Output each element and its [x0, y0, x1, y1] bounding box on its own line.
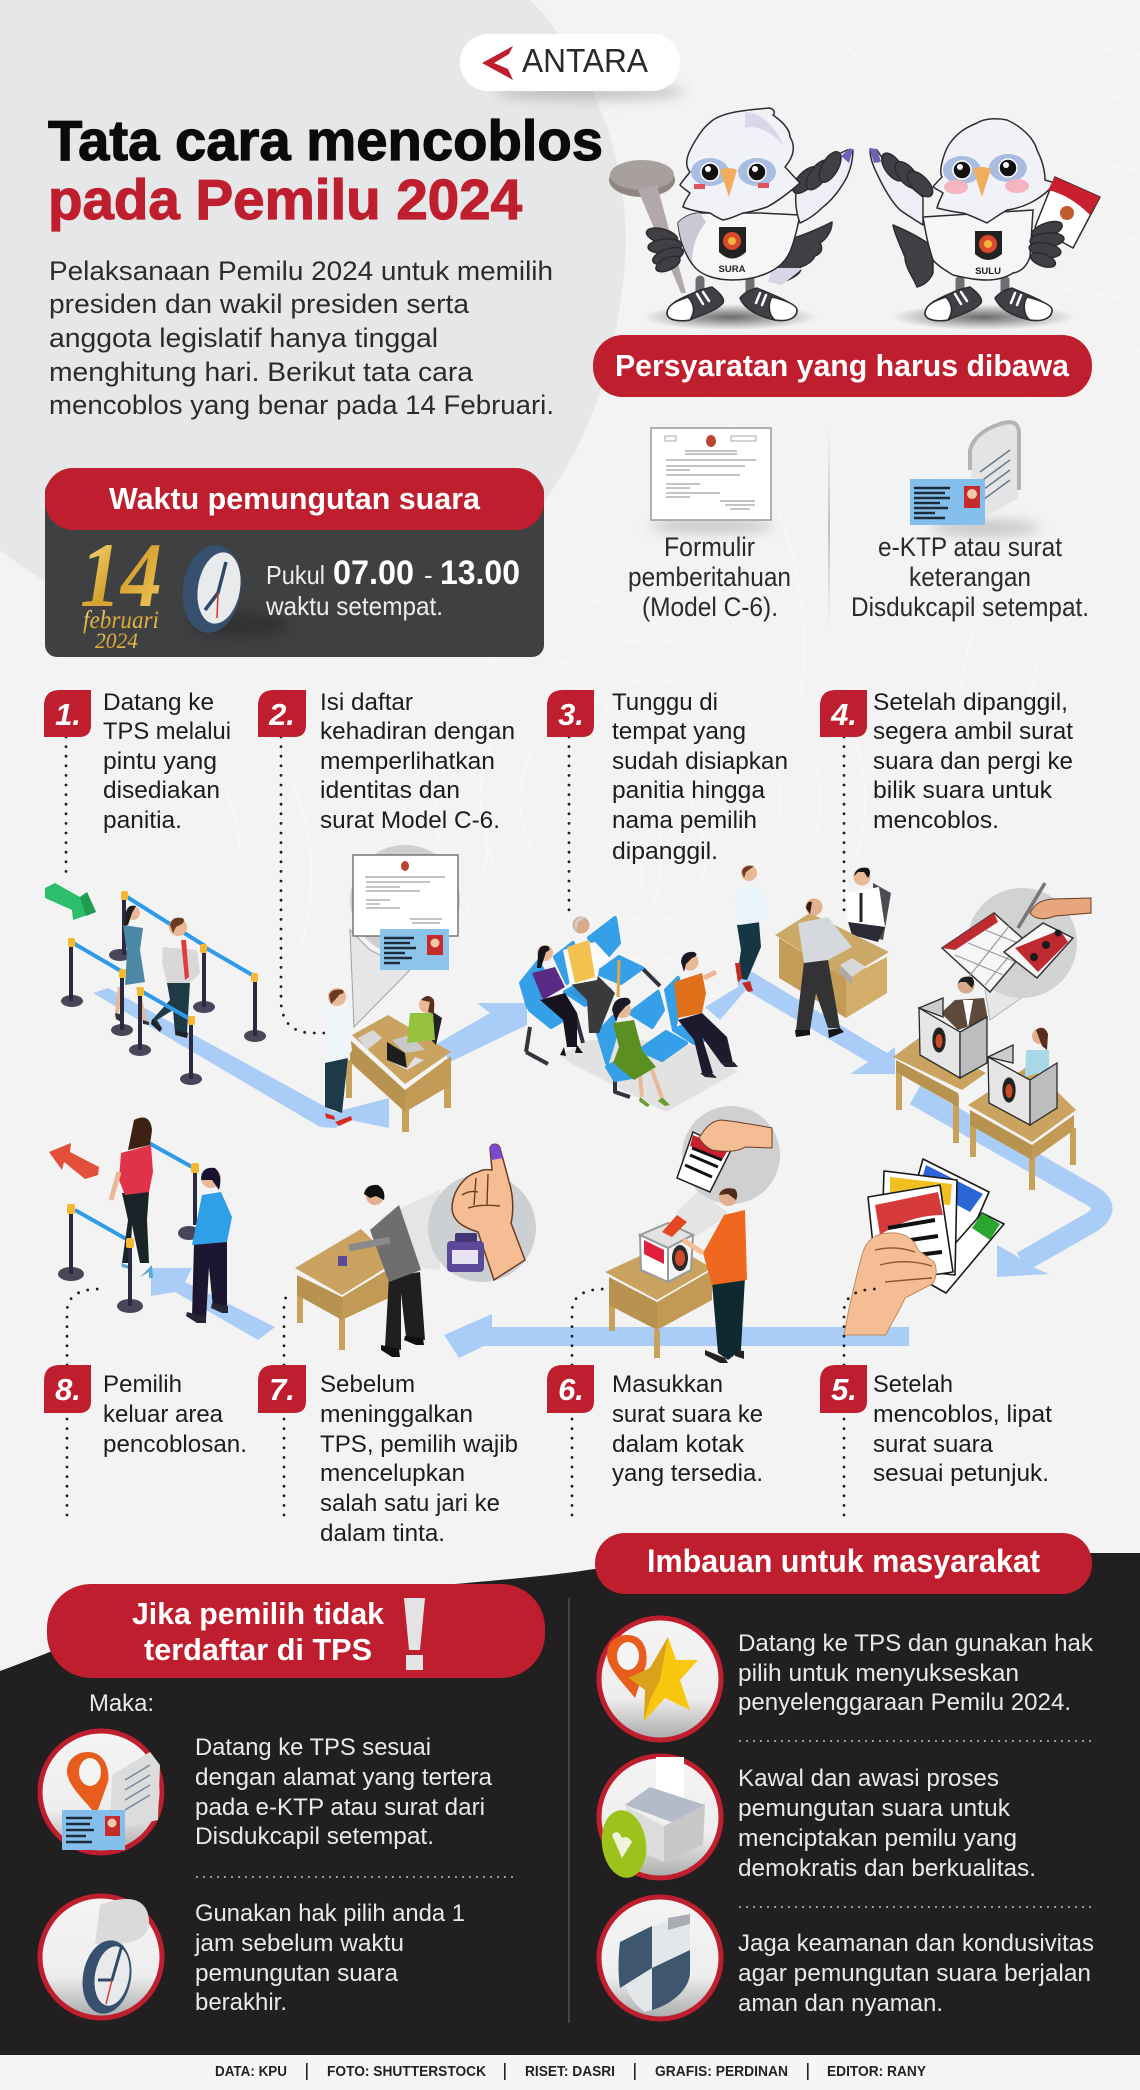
desk	[775, 913, 889, 1018]
badge 2	[258, 690, 306, 737]
badge 2: 2.	[268, 697, 295, 732]
step 4: mencoblos.	[873, 807, 999, 834]
caption: formulir: (Model C-6).	[642, 592, 778, 622]
text: datang ke TPS sesuai: dengan alamat yang tertera	[195, 1764, 493, 1791]
mascot: Sura: SURA	[719, 264, 746, 275]
heading: waktu: Waktu pemungutan suara	[109, 481, 481, 516]
text: gunakan hak pilih	[194, 1900, 465, 2016]
text: datang ke TPS dan gunakan: penyelenggaraan Pemilu 2024.	[738, 1689, 1071, 1716]
table A	[893, 1038, 986, 1143]
step 7: Sebelum	[320, 1371, 415, 1398]
step 1: disediakan	[103, 777, 220, 804]
person: man in orange shirt	[683, 1188, 747, 1363]
badge 8	[44, 1365, 91, 1413]
icon: e-KTP and letter	[910, 422, 1040, 536]
step 3: nama pemilih	[612, 807, 757, 834]
text: datang ke TPS sesuai: pada e-KTP atau surat dari	[195, 1794, 485, 1821]
icon: clock and lock	[40, 1896, 162, 2018]
text: datang ke TPS dan gunakan	[738, 1630, 1094, 1716]
text: jaga keamanan: Jaga keamanan dan kondusivitas	[738, 1930, 1094, 1957]
desk	[346, 1015, 451, 1132]
caption: formulir: Formulir	[664, 532, 755, 562]
scene: waiting chairs	[521, 916, 738, 1112]
text: datang ke TPS sesuai: Datang ke TPS sesuai	[195, 1734, 431, 1761]
step 5: mencoblos, lipat	[873, 1401, 1052, 1428]
footer credits	[0, 2055, 1140, 2090]
text: jaga keamanan: aman dan nyaman.	[738, 1990, 943, 2017]
mascot: Sulu: SULU	[975, 266, 1001, 277]
time text: -	[424, 560, 433, 590]
caption: e-KTP	[851, 532, 1089, 622]
step 7: salah satu jari ke	[320, 1490, 500, 1517]
heading: Jika pemilih tidak terdaftar: Jika pemilih tidak	[132, 1596, 385, 1631]
badge 1: 1.	[55, 697, 81, 732]
footer credits: GRAFIS: PERDINAN	[655, 2064, 788, 2080]
text: kawal dan awasi: menciptakan pemilu yang	[738, 1825, 1017, 1852]
icon: location and ID	[40, 1731, 162, 1853]
icon: form C-6	[649, 428, 773, 533]
scene: ballot box	[605, 1106, 780, 1363]
date badge: 14 februari 2024: 14	[80, 524, 162, 626]
stanchions back	[109, 891, 266, 1042]
text: gunakan hak pilih: berakhir.	[195, 1989, 287, 2016]
step 3	[547, 689, 788, 865]
logo: ANTARA	[460, 34, 685, 100]
text: gunakan hak pilih: pemungutan suara	[195, 1960, 399, 1987]
person: old man	[563, 916, 619, 1033]
step 1: TPS melalui	[103, 718, 231, 745]
date badge: 14 februari 2024: februari	[83, 607, 159, 634]
text: jaga keamanan: agar pemungutan suara berjalan	[738, 1960, 1091, 1987]
person: woman in teal dress	[115, 906, 149, 1025]
footer credits: RISET: DASRI	[525, 2064, 615, 2080]
step 8: keluar area	[103, 1401, 223, 1428]
vertical divider	[828, 428, 830, 628]
badge 3	[547, 690, 594, 737]
text: gunakan hak pilih: jam sebelum waktu	[194, 1930, 404, 1957]
person: woman in purple	[532, 945, 583, 1056]
footer credits: FOTO: SHUTTERSTOCK	[327, 2064, 486, 2080]
text: datang ke TPS dan gunakan: pilih untuk menyukseskan	[738, 1660, 1019, 1687]
time text	[265, 554, 520, 621]
heading: Persyaratan	[593, 335, 1092, 397]
text: datang ke TPS sesuai	[195, 1734, 493, 1850]
step 8: pencoblosan.	[103, 1431, 247, 1458]
step 6: surat suara ke	[612, 1401, 763, 1428]
icon: exclamation mark	[404, 1598, 425, 1670]
icon: ballot box and heart	[597, 1756, 721, 1881]
person: officer	[846, 868, 891, 942]
booth B	[988, 1045, 1057, 1125]
heading: Jika pemilih tidak terdaftar	[47, 1584, 545, 1678]
text: kawal dan awasi: demokratis dan berkualitas.	[738, 1855, 1036, 1882]
step 1	[44, 689, 231, 834]
badge 5	[820, 1365, 867, 1413]
person: voter at desk	[325, 988, 352, 1126]
intro text: Pelaksanaan Pemilu 2024 untuk memilih	[49, 256, 553, 286]
step 4: Setelah dipanggil,	[873, 689, 1068, 716]
step 4: bilik suara untuk	[873, 777, 1053, 804]
caption: e-KTP: Disdukcapil setempat.	[851, 592, 1089, 622]
person: clerk	[407, 996, 442, 1045]
badge 4	[820, 690, 867, 737]
time text: waktu setempat.	[265, 591, 443, 621]
step 4	[820, 689, 1073, 834]
step 5: surat suara	[873, 1431, 993, 1458]
text: gunakan hak pilih: Gunakan hak pilih anda 1	[195, 1900, 465, 1927]
heading: Imbauan untuk masyarakat: Imbauan untuk masyarakat	[647, 1543, 1040, 1579]
step 6: dalam kotak	[612, 1431, 745, 1458]
step 3: sudah disiapkan	[612, 748, 788, 775]
chairs	[521, 918, 714, 1097]
badge 8: 8.	[55, 1372, 81, 1407]
badge 7	[258, 1365, 306, 1413]
intro text: mencoblos yang benar pada 14 Februari.	[49, 390, 554, 420]
step 7: TPS, pemilih wajib	[320, 1431, 518, 1458]
step 6: yang tersedia.	[612, 1460, 763, 1487]
badge 5: 5.	[831, 1372, 857, 1407]
icon: shield	[599, 1897, 721, 2019]
table	[605, 1243, 712, 1358]
mascot: Sura	[609, 108, 853, 330]
logo: ANTARA: ANTARA	[522, 42, 648, 79]
dotted connectors top	[66, 737, 844, 1033]
intro text: anggota legislatif hanya tinggal	[49, 323, 438, 353]
step 7	[258, 1365, 518, 1547]
person: man in booth A	[941, 976, 988, 1030]
badge 7: 7.	[269, 1372, 295, 1407]
icon: clock	[177, 541, 290, 637]
step 1: panitia.	[103, 807, 182, 834]
date badge: 14 februari 2024: 2024	[95, 628, 138, 653]
dotted connectors bottom	[67, 1289, 878, 1515]
badge 4: 4.	[830, 697, 857, 732]
callout: inked finger	[382, 1144, 536, 1282]
text: datang ke TPS dan gunakan: Datang ke TPS dan gunakan hak	[738, 1630, 1094, 1657]
step 2: Isi daftar	[320, 689, 413, 716]
person: woman in green	[612, 998, 670, 1107]
step 3: tempat yang	[612, 718, 746, 745]
scene: exit queue	[49, 1118, 232, 1323]
arrow: entry	[45, 883, 96, 920]
callout: form and ID	[350, 845, 460, 1027]
badge 1	[44, 690, 91, 737]
stanchions front	[61, 938, 202, 1085]
step 6	[547, 1365, 763, 1487]
step 1: pintu yang	[103, 748, 217, 775]
caption: formulir: pemberitahuan	[628, 562, 791, 592]
person: standing man	[733, 865, 769, 992]
heading: Persyaratan: Persyaratan yang harus dibawa	[615, 348, 1070, 383]
title: Tata cara mencoblos	[48, 109, 603, 173]
step 2: identitas dan	[320, 777, 460, 804]
person: woman in booth B	[1025, 1028, 1049, 1077]
title	[48, 109, 603, 232]
scene: inking finger	[295, 1144, 536, 1357]
front stanchion	[117, 1238, 143, 1313]
badge 6: 6.	[558, 1372, 584, 1407]
text: Maka: Maka:	[89, 1690, 154, 1717]
desk	[295, 1229, 395, 1350]
title: pada Pemilu 2024	[48, 168, 522, 232]
text: kawal dan awasi: pemungutan suara untuk	[738, 1795, 1011, 1822]
step 2	[258, 689, 515, 834]
step 8: Pemilih	[103, 1371, 182, 1398]
step 3: panitia hingga	[612, 777, 765, 804]
intro text: menghitung hari. Berikut tata cara	[49, 357, 474, 387]
person: woman in red	[111, 1118, 153, 1278]
person: man in blue	[186, 1168, 232, 1323]
step 7: meninggalkan	[320, 1401, 473, 1428]
intro text: presiden dan wakil presiden serta	[49, 289, 470, 319]
flow arrows	[93, 970, 1102, 1358]
icon: pin and star	[599, 1618, 721, 1740]
person: man with red tie	[151, 918, 200, 1038]
step 5: sesuai petunjuk.	[873, 1460, 1049, 1487]
table B	[968, 1065, 1076, 1190]
dark bottom panel	[0, 1553, 1140, 2055]
step 2: kehadiran dengan	[320, 718, 515, 745]
step 2: surat Model C-6.	[320, 807, 500, 834]
callout: dropping ballot	[676, 1106, 780, 1240]
step 4: suara dan pergi ke	[873, 748, 1073, 775]
step 5	[820, 1365, 1052, 1487]
footer credits: DATA: KPU	[215, 2064, 287, 2080]
scene: queue entry	[61, 891, 266, 1085]
mascot: Sulu	[869, 119, 1100, 330]
ballot box	[640, 1215, 693, 1282]
person: man dipping finger	[349, 1185, 425, 1357]
step 6: Masukkan	[612, 1371, 723, 1398]
step 3: dipanggil.	[612, 838, 718, 865]
step 7: mencelupkan	[320, 1460, 465, 1487]
time text: 13.00	[440, 554, 520, 592]
scene: ballot pickup desk	[733, 865, 891, 1038]
step 2: memperlihatkan	[320, 748, 495, 775]
text: jaga keamanan	[738, 1930, 1094, 2017]
step 8	[44, 1365, 247, 1458]
text: kawal dan awasi: Kawal dan awasi proses	[738, 1765, 999, 1792]
badge 3: 3.	[558, 697, 584, 732]
intro text	[49, 256, 554, 420]
time text: Pukul	[266, 560, 325, 590]
caption: e-KTP: e-KTP atau surat	[878, 532, 1062, 562]
icon: folded ballots in hand	[844, 1159, 1004, 1335]
step 3: Tunggu di	[612, 689, 718, 716]
heading: waktu	[45, 468, 544, 530]
text: kawal dan awasi	[738, 1765, 1036, 1882]
caption: e-KTP: keterangan	[909, 562, 1031, 592]
badge 6	[547, 1365, 594, 1413]
footer credits: EDITOR: RANY	[827, 2064, 926, 2080]
step 1: Datang ke	[103, 689, 214, 716]
panel: waktu pemungutan suara	[45, 468, 544, 657]
scene: voting booths	[893, 883, 1091, 1190]
callout: marking ballot	[942, 883, 1091, 1020]
stanchions	[58, 1143, 200, 1281]
step 4: segera ambil surat	[873, 718, 1073, 745]
heading: Jika pemilih tidak terdaftar: terdaftar di TPS	[144, 1632, 372, 1667]
center divider	[568, 1598, 570, 2023]
person: man in orange	[674, 952, 738, 1078]
text: datang ke TPS sesuai: Disdukcapil setempat.	[195, 1823, 434, 1850]
arrow: exit	[49, 1143, 99, 1179]
time text: 07.00	[333, 554, 414, 592]
caption: formulir	[628, 532, 791, 622]
heading: Imbauan untuk masyarakat	[595, 1533, 1092, 1594]
step 7: dalam tinta.	[320, 1520, 445, 1547]
booth A	[919, 998, 987, 1078]
floor shadow	[560, 1040, 737, 1112]
step 5: Setelah	[873, 1371, 953, 1398]
scene: registration desk	[325, 845, 460, 1132]
person: bald voter	[795, 898, 852, 1038]
